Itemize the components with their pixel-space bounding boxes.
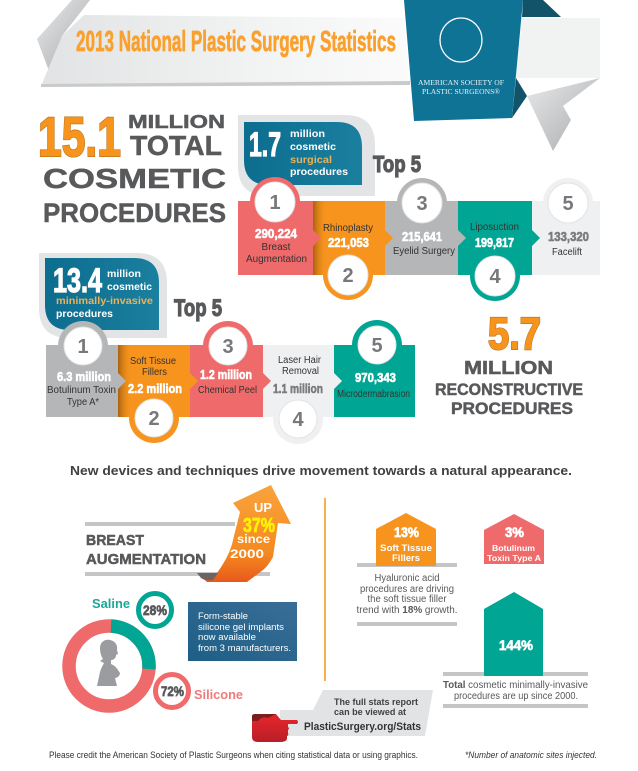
- step 3: 215,641: [402, 229, 442, 244]
- icon: pointing hand: [252, 714, 298, 742]
- panel: soft tissue fillers: 13%: [394, 524, 419, 540]
- arrow: up 37 percent since 2000: UP: [254, 500, 272, 515]
- step 2: 2: [342, 265, 354, 287]
- full stats report callout: [252, 690, 433, 742]
- step 4: [470, 222, 520, 301]
- breast augmentation heading with arrow: [85, 485, 291, 582]
- step 3: Chemical Peel: [198, 385, 257, 396]
- badge: 13.4 million minimally-invasive: 13.4: [53, 262, 102, 300]
- step 5: [337, 320, 410, 400]
- step 4: Removal: [282, 366, 319, 377]
- panel: soft tissue fillers: Hyaluronic acid: [374, 573, 440, 584]
- title: 2013 National Plastic Surgery Statistics: [76, 26, 396, 58]
- panel: soft tissue fillers: [356, 513, 458, 626]
- badge: 13.4 million minimally-invasive: minimally-invasive: [56, 295, 153, 307]
- stat: 5.7 million reconstructive procedures: 5.7: [488, 308, 541, 359]
- legend: silicone 72 percent: 72%: [161, 683, 184, 699]
- stat: 5.7 million reconstructive procedures: RECONSTRUCTIVE: [435, 380, 583, 399]
- step 1: [47, 321, 116, 408]
- step 1: 1: [77, 336, 89, 358]
- headline stat: 15.1 million total cosmetic procedures: 15.1: [38, 105, 121, 168]
- step 4: 199,817: [475, 235, 514, 250]
- heading: Top 5 minimally-invasive: Top 5: [174, 295, 222, 322]
- divider line: [324, 498, 326, 681]
- step 3: 3: [416, 193, 428, 215]
- step 3: Eyelid Surgery: [393, 246, 455, 257]
- panel: total minimally-invasive 144 percent: [443, 592, 588, 708]
- step 2: Soft Tissue: [130, 356, 176, 367]
- badge: 1.7 million surgical: surgical: [290, 154, 332, 166]
- step 2: Fillers: [142, 367, 167, 378]
- headline stat: 15.1 million total cosmetic procedures: 15.1: [38, 105, 121, 168]
- step 1: Augmentation: [246, 254, 307, 265]
- headline stat: 15.1 million total cosmetic procedures: [38, 105, 226, 228]
- stat: 5.7 million reconstructive procedures: PROCEDURES: [451, 399, 573, 418]
- heading: Top 5 surgical: Top 5: [373, 151, 421, 177]
- badge: 1.7 million surgical: cosmetic: [290, 141, 336, 153]
- arrow: up 37 percent since 2000: since: [237, 532, 270, 546]
- step 1: Breast: [262, 242, 291, 253]
- callout: form-stable silicone gel implants: from 3 manufacturers.: [198, 643, 291, 653]
- panel: soft tissue fillers: Fillers: [392, 553, 420, 563]
- breast augmentation heading with arrow: AUGMENTATION: [86, 551, 206, 568]
- panel: botulinum toxin type A: 3%: [505, 524, 525, 540]
- top 5 minimally-invasive strip: [46, 320, 415, 444]
- logo: American Society of Plastic Surgeons: AMERICAN SOCIETY OF: [418, 78, 504, 87]
- step 1: 290,224: [255, 226, 298, 241]
- step 5: Microdermabrasion: [337, 389, 410, 400]
- step 5: 5: [562, 193, 574, 215]
- panel: total minimally-invasive 144 percent: Total cosmetic minimally-invasive: [443, 680, 588, 691]
- step 5: 5: [371, 335, 383, 357]
- step 4: Laser Hair: [278, 355, 322, 366]
- step 2: [323, 223, 373, 300]
- badge: 13.4 million minimally-invasive: million: [107, 268, 141, 280]
- step 5: Facelift: [552, 247, 582, 258]
- arrow: up 37 percent since 2000: 2000: [230, 547, 264, 561]
- full stats report callout: PlasticSurgery.org/Stats: [304, 721, 421, 733]
- badge: 1.7 million surgical: million: [290, 128, 325, 140]
- step 5: 133,320: [548, 229, 589, 244]
- panel: botulinum toxin type A: Toxin Type A: [487, 554, 541, 563]
- badge: 13.4 million minimally-invasive: [39, 253, 167, 338]
- callout: form-stable silicone gel implants: Form-stable: [198, 611, 248, 621]
- breast augmentation heading with arrow: BREAST: [86, 532, 144, 549]
- legend: saline 28 percent: 28%: [143, 602, 167, 618]
- callout: form-stable silicone gel implants: now available: [198, 632, 256, 642]
- panel: soft tissue fillers: the soft tissue filler: [368, 594, 447, 605]
- badge: 1.7 million surgical: procedures: [290, 166, 348, 178]
- step 4: 4: [489, 266, 501, 288]
- step 4: 1.1 million: [273, 381, 323, 396]
- step 1: [246, 177, 307, 265]
- legend: saline 28 percent: [92, 594, 172, 626]
- step 1: 6.3 million: [57, 369, 111, 384]
- panel: botulinum toxin type A: Botulinum: [492, 544, 535, 553]
- top 5 surgical strip: [238, 177, 600, 301]
- step 4: Liposuction: [470, 222, 519, 233]
- icon: female silhouette: [97, 640, 120, 686]
- callout: form-stable silicone gel implants: [188, 602, 297, 661]
- arrow: up 37 percent since 2000: 37%: [243, 515, 275, 537]
- step 1: 1: [269, 192, 281, 214]
- panel: botulinum toxin type A: [484, 514, 544, 564]
- donut chart: saline vs silicone: [69, 626, 149, 706]
- headline stat: 15.1 million total cosmetic procedures: COSMETIC: [43, 163, 226, 194]
- headline stat: 15.1 million total cosmetic procedures: PROCEDURES: [43, 198, 226, 228]
- logo: American Society of Plastic Surgeons: PLASTIC SURGEONS®: [422, 87, 500, 96]
- badge: 1.7 million surgical: [238, 115, 375, 196]
- step 3: 3: [222, 336, 234, 358]
- panel: soft tissue fillers: procedures are driving: [360, 584, 454, 595]
- logo: American Society of Plastic Surgeons: [404, 0, 523, 121]
- stat: 5.7 million reconstructive procedures: 5.7: [488, 308, 541, 359]
- stat: 5.7 million reconstructive procedures: MILLION: [464, 358, 553, 378]
- badge: 1.7 million surgical: 1.7: [249, 126, 281, 164]
- callout: form-stable silicone gel implants: silicone gel implants: [198, 622, 285, 632]
- full stats report callout: The full stats report: [334, 697, 418, 707]
- panel: soft tissue fillers: trend with 18% growth.: [356, 605, 458, 616]
- step 4: [273, 355, 323, 444]
- step 2: [128, 356, 182, 443]
- legend: silicone 72 percent: Silicone: [194, 688, 243, 702]
- step 3: [393, 178, 455, 257]
- full stats report callout: can be viewed at: [334, 707, 406, 717]
- header banner: [37, 0, 600, 151]
- step 5: 970,343: [355, 370, 396, 385]
- step 1: Botulinum Toxin: [47, 385, 116, 396]
- step 2: 221,053: [328, 235, 369, 250]
- step 2: 2.2 million: [128, 381, 182, 396]
- section heading: New devices and techniques drive movement towards a natural appearance.: [70, 463, 572, 478]
- badge: 13.4 million minimally-invasive: cosmetic: [107, 281, 152, 293]
- step 1: Type A*: [67, 397, 99, 408]
- footer: credit note: Please credit the American Society of Plastic Surgeons when citing statistical data or using graphics.: [49, 750, 418, 760]
- legend: saline 28 percent: Saline: [92, 597, 130, 611]
- panel: soft tissue fillers: Soft Tissue: [380, 543, 432, 553]
- panel: total minimally-invasive 144 percent: 144%: [499, 637, 534, 653]
- badge: 13.4 million minimally-invasive: procedures: [56, 308, 113, 320]
- step 2: Rhinoplasty: [323, 223, 373, 234]
- panel: total minimally-invasive 144 percent: procedures are up since 2000.: [454, 691, 578, 702]
- arrow: up 37 percent since 2000: [197, 485, 291, 582]
- step 2: 2: [148, 408, 160, 430]
- step 3: 1.2 million: [200, 367, 252, 382]
- footer: footnote: *Number of anatomic sites injected.: [465, 750, 597, 760]
- legend: silicone 72 percent: [156, 674, 243, 708]
- step 5: [543, 178, 593, 258]
- headline stat: 15.1 million total cosmetic procedures: MILLION: [128, 112, 225, 132]
- step 3: [198, 321, 257, 396]
- stat: 5.7 million reconstructive procedures: [435, 308, 583, 418]
- step 4: 4: [292, 409, 304, 431]
- headline stat: 15.1 million total cosmetic procedures: TOTAL: [130, 130, 222, 161]
